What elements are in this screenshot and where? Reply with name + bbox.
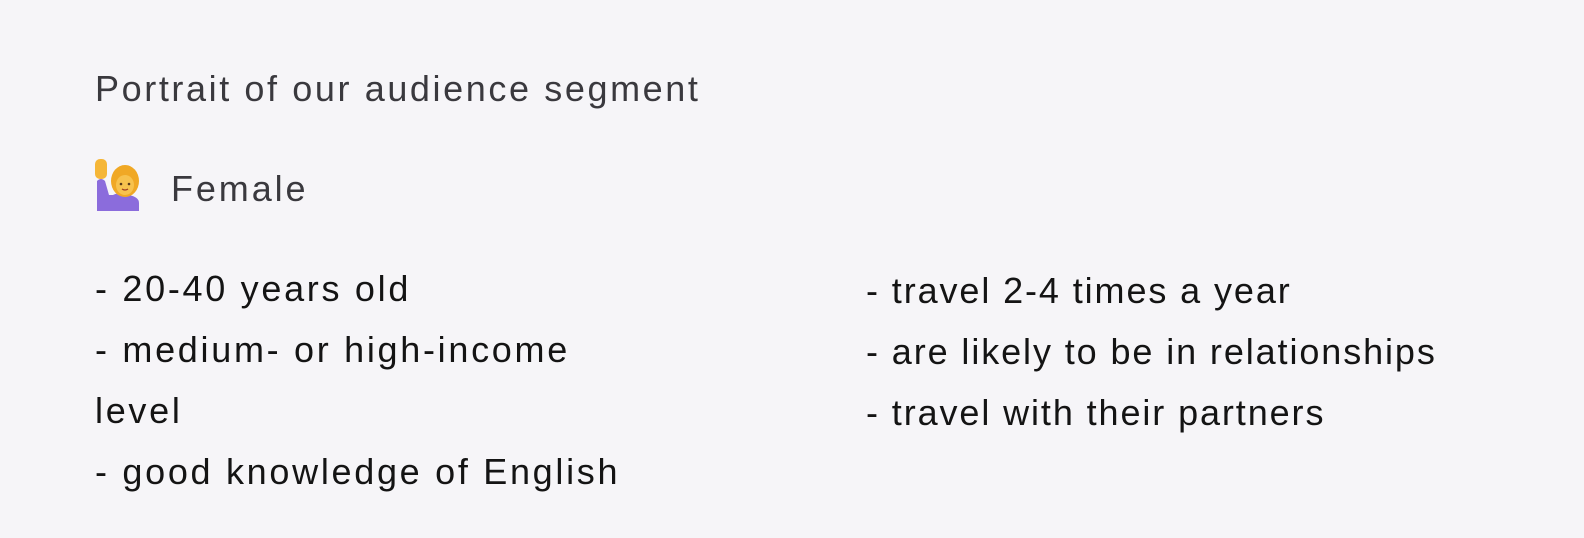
segment heading: female — [95, 159, 308, 211]
text block: right column: - travel 2-4 times a year — [866, 270, 1292, 311]
text block: right column — [866, 270, 1437, 433]
text block: left column — [95, 268, 620, 492]
text block: right column: - are likely to be in relationships — [866, 331, 1437, 372]
text block: left column: - medium- or high-income — [95, 329, 570, 370]
icon: woman raising hand emoji — [95, 159, 139, 211]
text block: right column: - travel with their partners — [866, 392, 1325, 433]
text block: left column: - good knowledge of English — [95, 451, 620, 492]
title: Portrait of our audience segment — [95, 68, 700, 109]
text block: left column: level — [95, 390, 183, 431]
text block: left column: - 20-40 years old — [95, 268, 411, 309]
label: Female: Female — [171, 168, 308, 209]
